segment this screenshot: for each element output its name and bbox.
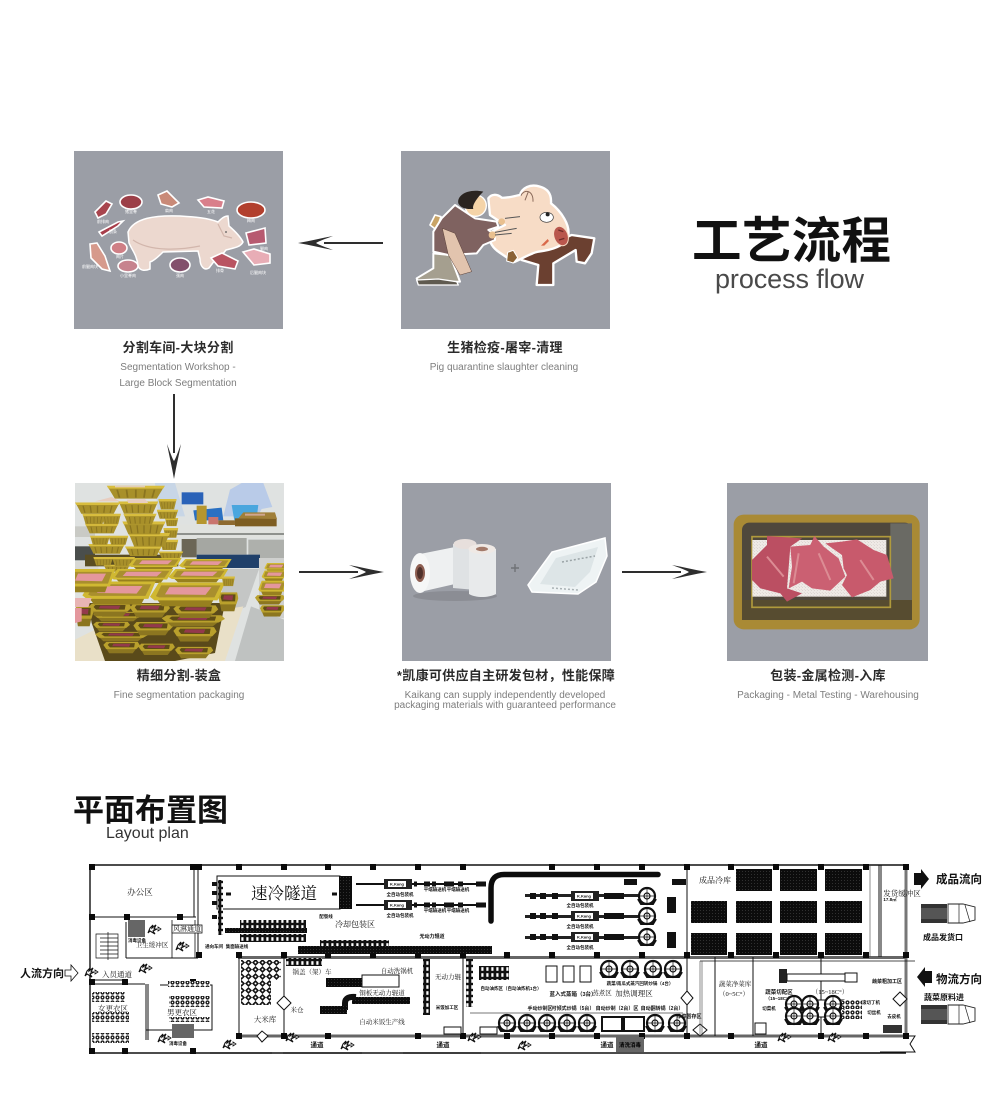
vegetable zone: 蔬菜净菜库 bbox=[719, 979, 752, 988]
subtitle: process flow: process flow bbox=[715, 264, 864, 294]
meat labels: 五花 bbox=[207, 208, 215, 215]
meat labels: 梅肉 bbox=[247, 217, 255, 224]
changing rooms: 女更衣区 bbox=[98, 1003, 128, 1013]
label: shipping dock: 成品发货口 bbox=[923, 932, 963, 942]
vegetable zone: （15~18C°） bbox=[812, 988, 848, 996]
office and hygiene zone: 风淋通道 bbox=[173, 924, 201, 933]
caption: 凯康包材: *凯康可供应自主研发包材，性能保障 bbox=[397, 668, 615, 683]
office and hygiene zone: 办公区 bbox=[127, 887, 153, 897]
rice and cooking zone bbox=[241, 958, 497, 1042]
meat labels: 肉片 bbox=[116, 253, 124, 260]
rice and cooking zone: 米仓 bbox=[290, 1005, 304, 1014]
arrow: segmentation to fine cut bbox=[167, 394, 181, 479]
vegetable zone bbox=[676, 865, 907, 1036]
heating and conditioning zone: 蒸煮区 bbox=[592, 988, 612, 997]
office and hygiene zone bbox=[85, 887, 223, 977]
rice and cooking zone: 大米库 bbox=[254, 1014, 277, 1024]
finished cold store: 发货缓冲区 bbox=[883, 888, 921, 898]
changing rooms: 男更衣区 bbox=[167, 1007, 197, 1017]
filling lines bbox=[525, 879, 686, 951]
rice and cooking zone: 无动力辊 bbox=[435, 972, 462, 981]
heading: 平面布置图: 平面布置图 bbox=[73, 793, 228, 828]
office and hygiene zone: 通向车间 bbox=[205, 943, 223, 950]
filling lines: 全自动包装机 bbox=[566, 902, 594, 909]
arrow: packaging to finished bbox=[622, 565, 707, 579]
meat labels: 小里脊肉 bbox=[120, 272, 136, 279]
label: vegetable inbound: 蔬菜原料进 bbox=[924, 992, 964, 1002]
finished cold store: 17.8㎡ bbox=[883, 896, 897, 902]
heating and conditioning zone: 蓝入式蒸箱（3台） bbox=[549, 990, 597, 998]
subheading: Layout plan: Layout plan bbox=[106, 825, 189, 842]
panel: fine cut photo bbox=[65, 483, 288, 661]
office and hygiene zone: 卫生缓冲区 bbox=[136, 940, 169, 949]
label: finished goods flow: 成品流向 bbox=[936, 872, 982, 886]
illustration: butcher bbox=[417, 191, 520, 285]
caption: 精细分割: Fine segmentation packaging bbox=[114, 690, 244, 701]
caption: 包装金属检测: Packaging - Metal Testing - Warehousing bbox=[737, 690, 919, 701]
icon: people flow arrow bbox=[65, 965, 78, 981]
filling lines: 全自动包装机 bbox=[566, 923, 594, 930]
vegetable zone: 切菜机 bbox=[762, 1005, 776, 1012]
caption: 凯康包材 bbox=[394, 668, 616, 711]
meat labels: 后腿肉块 bbox=[250, 269, 266, 276]
vegetable zone: 滚切丁机 bbox=[862, 999, 880, 1006]
changing rooms: 入员通道 bbox=[102, 969, 132, 979]
packaging lines: 全自动包装机 bbox=[386, 912, 414, 919]
caption: 精细分割 bbox=[114, 668, 244, 701]
icon: inbound truck bbox=[921, 1005, 975, 1024]
corridor labels: 通道 bbox=[600, 1040, 614, 1049]
quick-freeze tunnel bbox=[212, 876, 375, 950]
corridor labels: 通道 bbox=[754, 1040, 768, 1049]
photo: filled meat trays bbox=[65, 558, 288, 623]
caption: 包装金属检测 bbox=[737, 668, 919, 701]
illustration: gold tray bbox=[734, 515, 920, 629]
illustration: meat slices bbox=[752, 536, 894, 602]
rice and cooking zone: 锅盖（架）车 bbox=[292, 967, 332, 976]
changing rooms bbox=[92, 969, 210, 1047]
illustration: pig on bench bbox=[485, 186, 594, 285]
corridor labels bbox=[223, 1033, 915, 1052]
floor plan bbox=[20, 864, 982, 1054]
packaging lines bbox=[356, 879, 486, 919]
quick-freeze tunnel: 速冷隧道 bbox=[251, 884, 317, 903]
vegetable zone: 净菜暂存区 bbox=[676, 1013, 702, 1020]
quick-freeze tunnel: 集面输送线 bbox=[226, 943, 249, 950]
meat labels: 猪里脊 bbox=[125, 208, 137, 215]
photo: tray on conveyor bbox=[218, 512, 277, 526]
arrow: slaughter to segmentation bbox=[298, 236, 383, 250]
corridor labels: 通道 bbox=[436, 1040, 450, 1049]
caption: 分割车间: Large Block Segmentation bbox=[119, 378, 237, 389]
heating and conditioning zone: 加热调理区 bbox=[615, 988, 653, 998]
icon: plus bbox=[511, 564, 519, 572]
packaging lines: 平端输送机 bbox=[424, 907, 447, 914]
meat labels: 颈肉 bbox=[176, 272, 184, 279]
vegetable zone: 切丝机 bbox=[867, 1009, 881, 1016]
changing rooms: 消毒设备 bbox=[169, 1040, 187, 1047]
caption: 分割车间: 分割车间-大块分割 bbox=[122, 340, 234, 355]
packaging lines: 平端输送机 bbox=[424, 886, 447, 893]
meat labels: 排骨 bbox=[216, 267, 224, 274]
vegetable zone: （15~18C°） bbox=[766, 996, 792, 1001]
vegetable zone: （0~5C°） bbox=[719, 990, 749, 998]
packaging lines: 全自动包装机 bbox=[386, 891, 414, 898]
caption: 生猪检疫 bbox=[430, 340, 578, 373]
meat labels bbox=[82, 207, 268, 279]
label: finished goods flow bbox=[914, 869, 982, 889]
caption: 凯康包材: Kaikang can supply independently developed bbox=[405, 690, 605, 701]
heating and conditioning zone: 蔬菜/南瓜式蒸汽回转炒锅（4台） bbox=[607, 980, 673, 987]
packaging lines: 平端输送机 bbox=[447, 907, 470, 914]
caption: 凯康包材: packaging materials with guaranteed performance bbox=[394, 700, 616, 711]
photo background: workshop bbox=[75, 483, 284, 661]
corridor labels: 清洗消毒 bbox=[619, 1041, 641, 1049]
meat labels: 前腿肉块 bbox=[82, 263, 98, 270]
caption: 生猪检疫: Pig quarantine slaughter cleaning bbox=[430, 362, 578, 373]
label: people flow: 人流方向 bbox=[20, 966, 64, 980]
label: logistics flow: 物流方向 bbox=[936, 972, 982, 986]
vegetable zone: 蔬菜切配区 bbox=[765, 988, 793, 996]
quick-freeze tunnel: 配餐线 bbox=[319, 913, 333, 920]
caption: 分割车间: Segmentation Workshop - bbox=[120, 362, 236, 373]
illustration: white tray bbox=[528, 538, 607, 594]
heating and conditioning zone: 可倾式炒锅（5台） bbox=[552, 1005, 594, 1012]
title: 工艺流程: 工艺流程 bbox=[692, 214, 891, 269]
structural columns bbox=[89, 864, 909, 1054]
label: people flow bbox=[20, 965, 78, 981]
heating and conditioning zone bbox=[470, 961, 686, 1031]
caption: 分割车间 bbox=[119, 340, 237, 389]
vegetable zone: 去皮机 bbox=[887, 1013, 901, 1020]
caption: 生猪检疫: 生猪检疫-屠宰-清理 bbox=[447, 340, 563, 355]
meat labels: 前排肉 bbox=[97, 218, 109, 225]
caption: 包装金属检测: 包装-金属检测-入库 bbox=[770, 668, 886, 683]
meat labels: 肩肉 bbox=[165, 207, 173, 214]
unpowered roller conveyor: 无动力辊道 bbox=[419, 933, 445, 940]
heating and conditioning zone: 手动炒制区 bbox=[527, 1005, 553, 1012]
rice and cooking zone: 米饭加工区 bbox=[436, 1004, 459, 1011]
illustration: meat cuts bbox=[90, 191, 270, 272]
heating and conditioning zone: 自动翻转锅（2台） bbox=[641, 1005, 683, 1012]
icon: finished goods truck bbox=[921, 904, 975, 923]
caption: 精细分割: 精细分割-装盒 bbox=[137, 668, 221, 683]
panel: packaged meat bbox=[727, 483, 928, 661]
illustration: film rolls bbox=[410, 539, 497, 601]
rice and cooking zone: 自动米饭生产线 bbox=[359, 1017, 405, 1026]
photo: empty tray stacks bbox=[75, 486, 183, 572]
building walls bbox=[90, 865, 915, 1053]
panel: butcher and pig bbox=[401, 151, 610, 329]
title: 工艺流程 bbox=[692, 214, 891, 294]
corridor labels: 通道 bbox=[310, 1040, 324, 1049]
packaging lines: 平端输送机 bbox=[447, 886, 470, 893]
rice and cooking zone: 铜板无动力辊道 bbox=[359, 988, 405, 997]
vegetable zone: 蔬菜粗加工区 bbox=[872, 978, 902, 985]
finished cold store bbox=[691, 869, 921, 955]
finished cold store: 成品冷库 bbox=[699, 875, 731, 885]
illustration: pig bbox=[128, 216, 243, 270]
label: logistics flow bbox=[917, 967, 982, 987]
photo: lower dark trays bbox=[75, 592, 238, 658]
rice and cooking zone: 自动洗锅机 bbox=[381, 966, 414, 975]
panel: meat cuts and pig bbox=[74, 151, 283, 329]
meat labels: 肋条 bbox=[109, 228, 117, 235]
filling lines: 全自动包装机 bbox=[566, 944, 594, 951]
arrow: fine cut to packaging bbox=[299, 565, 384, 579]
meat labels: 腿肉 bbox=[260, 245, 268, 252]
office and hygiene zone: 消毒设备 bbox=[128, 937, 146, 944]
heating and conditioning zone: 自动炒制（2台）区 bbox=[596, 1005, 638, 1012]
unpowered roller conveyor bbox=[298, 874, 658, 954]
panel: packaging materials bbox=[402, 483, 611, 661]
quick-freeze tunnel: 冷却包装区 bbox=[335, 919, 375, 929]
heating and conditioning zone: 自动油炸区（自动油炸机1台） bbox=[480, 985, 542, 992]
